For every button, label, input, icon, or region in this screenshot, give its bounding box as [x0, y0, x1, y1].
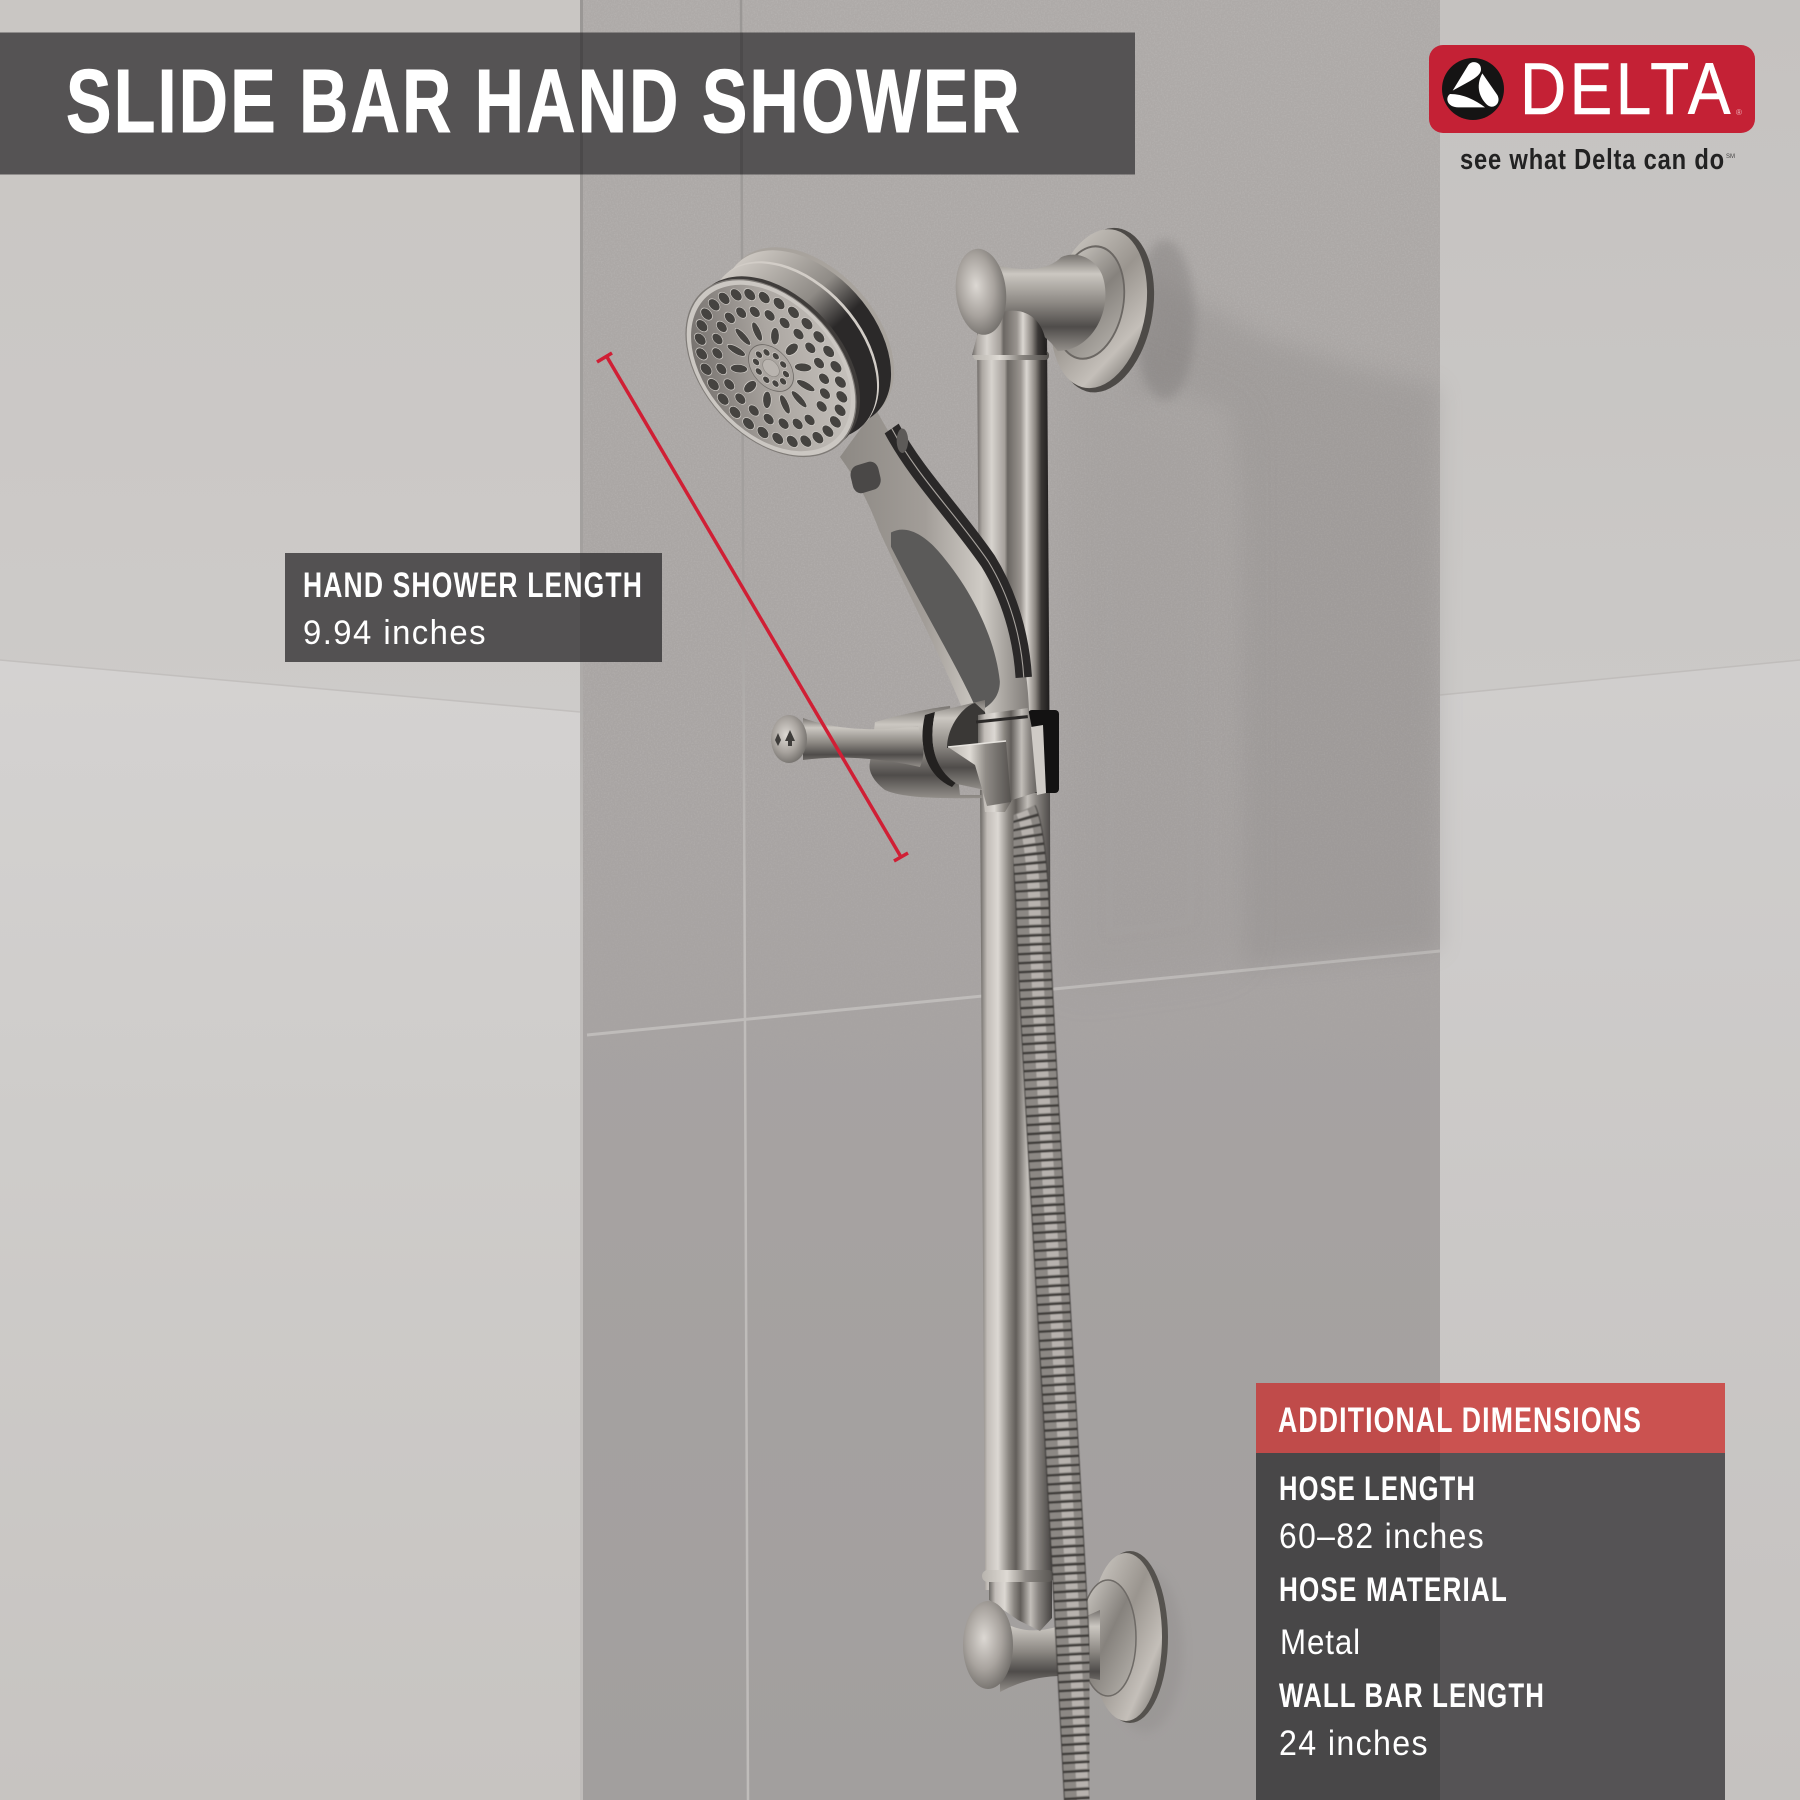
- Delta logo: [1429, 45, 1755, 133]
- spray face: [652, 247, 890, 489]
- flange: [1036, 215, 1169, 405]
- wall bar length: [1279, 1677, 1545, 1763]
- panel header: ADDITIONAL DIMENSIONS: [1278, 1401, 1642, 1440]
- handle: [840, 408, 1029, 730]
- elbow over bar: [972, 311, 1047, 355]
- callout: hand shower length: [285, 553, 662, 662]
- spray button: [849, 459, 883, 495]
- wall bar length: WALL BAR LENGTH: [1279, 1677, 1545, 1715]
- hose material: Metal: [1280, 1623, 1361, 1662]
- logo wordmark: DELTA: [1520, 49, 1734, 130]
- bottom wall mount: [963, 1551, 1168, 1723]
- diverter lever and holder: [771, 700, 990, 798]
- rubber grip: [891, 530, 1000, 712]
- title banner: [0, 32, 1135, 174]
- front body: [932, 700, 985, 790]
- mount arm: [1000, 1610, 1100, 1692]
- background: right wall tiles: [1440, 0, 1800, 1800]
- rear collar: [870, 706, 985, 798]
- background: left wall tiles: [0, 0, 580, 1800]
- shadows cast on wall: [1060, 240, 1440, 1732]
- hose clip band: [1028, 710, 1059, 793]
- registered mark: ®: [1736, 108, 1742, 117]
- panel header: [1256, 1383, 1725, 1453]
- lever arm: [803, 718, 924, 767]
- hose length: 60–82 inches: [1279, 1517, 1485, 1556]
- flange: [1092, 1551, 1168, 1723]
- metal hose: [1020, 812, 1083, 1800]
- bar top ring: [973, 351, 1049, 360]
- socket: [947, 703, 990, 748]
- bar end: [989, 1582, 1052, 1631]
- title: SLIDE BAR HAND SHOWER: [66, 52, 1022, 152]
- logo emblem: [1442, 58, 1504, 120]
- hose length: HOSE LENGTH: [1279, 1470, 1476, 1508]
- knob: [951, 245, 1011, 339]
- hand shower: [652, 215, 1029, 730]
- knob: [963, 1601, 1013, 1689]
- head back layers: [659, 215, 927, 484]
- tagline: see what Delta can do: [1460, 144, 1725, 176]
- tagline: SM: [1726, 154, 1735, 160]
- hose length: [1279, 1470, 1485, 1556]
- callout: hand shower length: 9.94 inches: [303, 614, 487, 652]
- top wall mount: [951, 215, 1169, 405]
- bar lower ring: [982, 1570, 1054, 1582]
- hose material: HOSE MATERIAL: [1279, 1571, 1508, 1609]
- lever knob with arrows: [771, 715, 807, 763]
- wall bar length: 24 inches: [1279, 1724, 1429, 1763]
- panel: additional dimensions: [1256, 1383, 1725, 1800]
- hose holder bracket: [948, 708, 1046, 812]
- panel body: [1256, 1453, 1725, 1800]
- red dimension line: [597, 353, 908, 861]
- dark ring: [922, 712, 958, 787]
- mount neck: [997, 255, 1105, 351]
- hose material: [1279, 1571, 1508, 1662]
- background: central tile column: [580, 0, 1440, 1800]
- callout: hand shower length: HAND SHOWER LENGTH: [303, 566, 643, 605]
- slide bar: [973, 330, 1052, 1590]
